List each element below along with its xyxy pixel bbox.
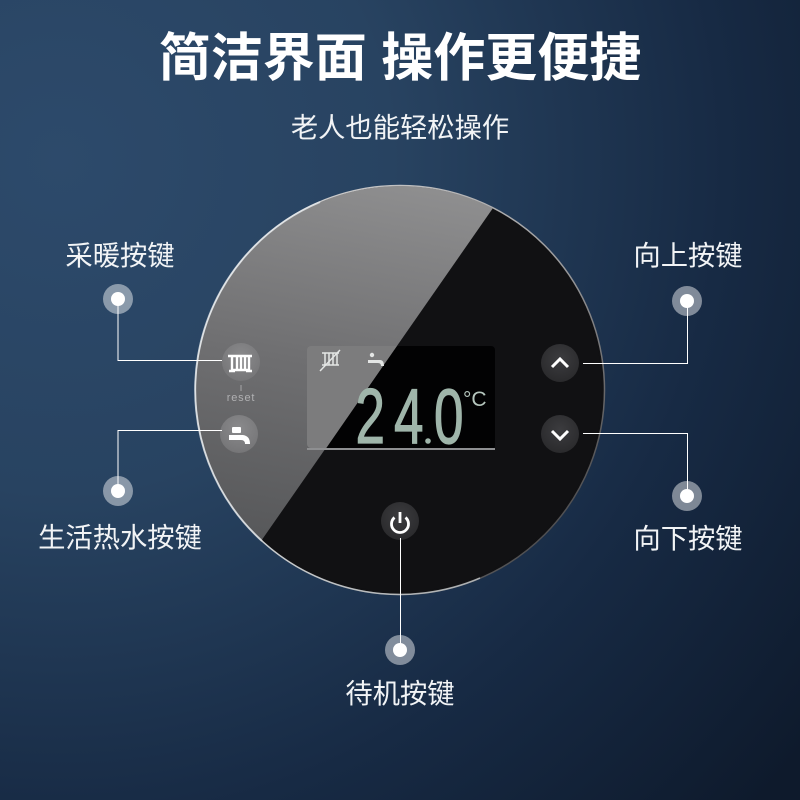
button: down [541, 415, 579, 453]
temperature digit 4: 4 [394, 374, 423, 461]
marker halo [385, 635, 415, 665]
leader line [583, 434, 688, 496]
leader line [583, 301, 688, 364]
icon: up chevron [552, 359, 568, 367]
icon: radiator [228, 356, 252, 371]
button disc [541, 415, 579, 453]
icon: power [391, 512, 408, 532]
icon: tap [229, 427, 250, 444]
label: 待机按键 [345, 678, 455, 709]
marker dot [680, 489, 694, 503]
button: power [381, 502, 419, 540]
leader line [118, 299, 222, 360]
label: 向上按键 [633, 240, 743, 271]
icon: LCD radiator [320, 350, 340, 371]
label: 采暖按键 [65, 240, 175, 271]
LCD under reflection [307, 346, 397, 448]
marker halo [672, 286, 702, 316]
LCD screen [307, 346, 495, 450]
temperature reading [356, 374, 463, 461]
marker dot [111, 484, 125, 498]
marker dot [393, 643, 407, 657]
marker halo [103, 476, 133, 506]
label: 生活热水按键 [38, 522, 202, 553]
leader line [118, 430, 222, 491]
label: 向下按键 [633, 523, 743, 554]
marker dot [680, 294, 694, 308]
control panel [180, 175, 604, 600]
callout: down key [583, 434, 743, 554]
degree unit: °C [463, 388, 487, 411]
rim highlight: left edge [195, 202, 320, 541]
icon: down chevron [552, 431, 568, 439]
callout: standby key [345, 538, 455, 709]
panel rim [196, 186, 604, 594]
subtitle: 老人也能轻松操作 [291, 112, 509, 143]
black panel face [198, 188, 602, 592]
reset text: reset [227, 392, 255, 404]
button: up [541, 344, 579, 382]
button: hot water [220, 415, 258, 453]
reset tick [240, 385, 242, 391]
title: 简洁界面 操作更便捷 [159, 30, 641, 88]
button disc [541, 344, 579, 382]
temperature digit 0: 0 [434, 374, 463, 461]
temperature digit 2: 2 [356, 374, 385, 461]
marker dot [111, 292, 125, 306]
callout: heating key [65, 240, 222, 360]
button disc [220, 415, 258, 453]
leader line [400, 538, 402, 650]
glass reflection [196, 186, 492, 540]
rim highlight: bottom edge [262, 541, 480, 594]
callout: up key [583, 240, 743, 364]
reset label [227, 385, 255, 404]
callout: hot water key [38, 430, 222, 553]
button disc [381, 502, 419, 540]
button: heating [222, 343, 260, 381]
marker halo [672, 481, 702, 511]
LCD lower highlight [307, 448, 495, 450]
marker halo [103, 284, 133, 314]
decimal point [425, 438, 431, 444]
icon: LCD tap [368, 353, 384, 366]
button disc [222, 343, 260, 381]
